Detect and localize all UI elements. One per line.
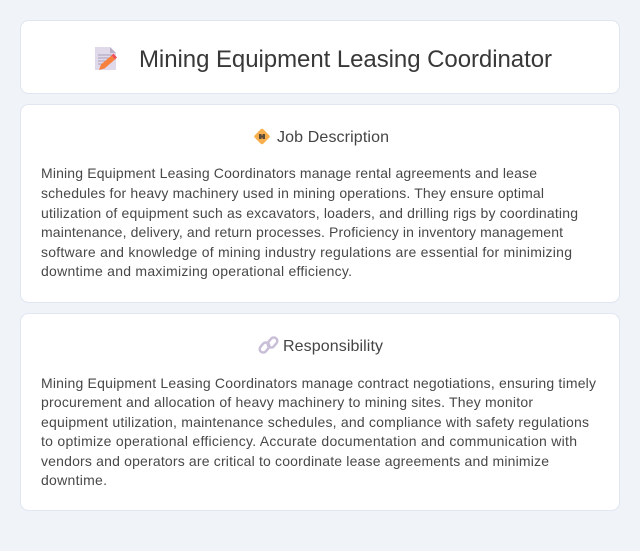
responsibility text: vendors and operators are critical to coordinate lease agreements and minimize (41, 453, 549, 469)
responsibility text: procurement and allocation of heavy machinery to mining sites. They monitor (41, 394, 533, 410)
responsibility text: to optimize operational efficiency. Accurate documentation and communication with (41, 433, 577, 449)
responsibility text (41, 375, 596, 488)
job description text: Mining Equipment Leasing Coordinators manage rental agreements and lease (41, 165, 537, 181)
responsibility text: downtime. (41, 472, 107, 488)
job description text: software and knowledge of mining industry regulations are essential for minimizing (41, 244, 572, 260)
panel: responsibility (20, 314, 620, 510)
job description text: utilization of equipment such as excavators, loaders, and drilling rigs by coordinating (41, 205, 578, 221)
job description text: schedules for heavy machinery used in mining operations. They ensure optimal (41, 185, 544, 201)
panel: job description (20, 104, 620, 302)
title text: Mining Equipment Leasing Coordinator (139, 46, 552, 73)
icon: mining diamond sign (254, 128, 270, 145)
responsibility text: Mining Equipment Leasing Coordinators manage contract negotiations, ensuring timely (41, 375, 596, 391)
heading: job description: Job Description (277, 129, 389, 146)
panel: title (20, 20, 620, 94)
icon: document with pencil (95, 47, 117, 70)
job description text (41, 165, 578, 279)
heading: responsibility: Responsibility (283, 338, 383, 355)
responsibility text: equipment utilization, maintenance schedules, and compliance with safety regulations (41, 414, 589, 430)
job description text: maintenance, delivery, and return processes. Proficiency in inventory management (41, 224, 563, 240)
job description text: downtime and maximizing operational efficiency. (41, 263, 352, 279)
icon: chain link (258, 336, 279, 354)
